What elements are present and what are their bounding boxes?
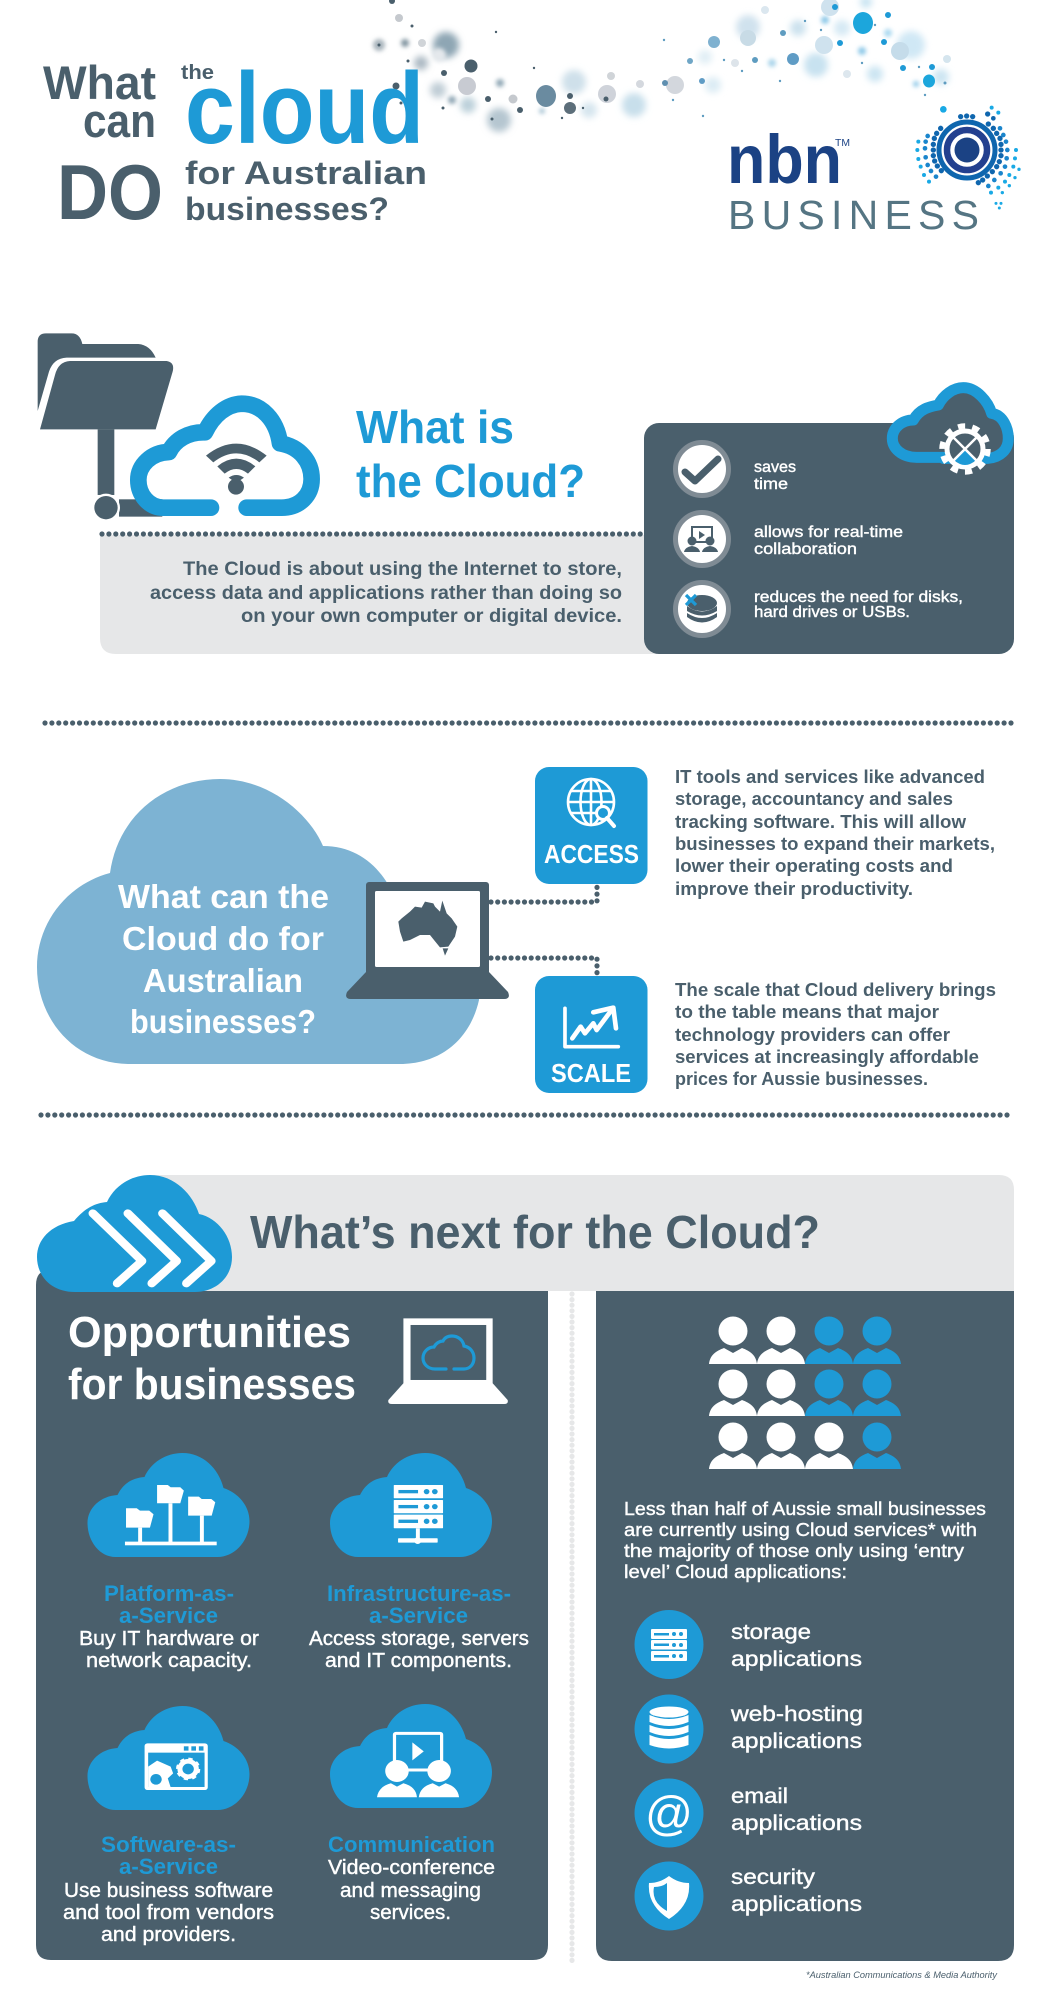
icon: dotted Australia logo [915, 106, 1021, 209]
text: adoption statement [624, 1498, 986, 1582]
icon: laptop with Australia map [346, 882, 509, 999]
text: benefits: allows for real-time [754, 524, 903, 541]
text: adoption statement: Less than half of Aussie small businesses [624, 1498, 986, 1519]
footnote: *Australian Communications & Media Authority [806, 1970, 998, 1981]
icon: cloud with wifi [138, 404, 312, 508]
text: software as a service: and tool from vendors [63, 1902, 274, 1924]
icon: cloud with server [330, 1453, 492, 1557]
text: cloud definition: on your own computer or digital device. [241, 605, 622, 627]
text: scale description [675, 979, 996, 1089]
heading: what is the cloud: What is [356, 401, 514, 453]
nbn business logo: BUSINESS [728, 192, 979, 238]
text: adoption statement: are currently using Cloud services* with [624, 1519, 977, 1540]
text: scale description: technology providers can offer [675, 1024, 950, 1045]
text: software as a service: Software-as- [101, 1832, 236, 1857]
text: benefits: saves [754, 459, 796, 476]
cloud with question: What can the [118, 878, 329, 915]
heading: opportunities: for businesses [68, 1360, 356, 1409]
title: for Australian [185, 155, 427, 191]
icon: cloud with chevrons [37, 1175, 232, 1292]
text: communication [328, 1832, 495, 1924]
text: access description: storage, accountancy and sales [675, 788, 953, 809]
item: security applications: security [731, 1866, 816, 1889]
icon: cloud with gear [892, 388, 1008, 472]
text: platform as a service: network capacity. [86, 1650, 252, 1672]
item: email applications: applications [731, 1812, 862, 1835]
text: benefits: hard drives or USBs. [754, 604, 910, 621]
text: communication: Communication [328, 1832, 495, 1857]
title: businesses? [185, 191, 389, 227]
text: benefits: collaboration [754, 541, 857, 558]
heading: what is the cloud [356, 401, 585, 507]
text: adoption statement: level’ Cloud applications: [624, 1561, 847, 1582]
title [43, 53, 427, 236]
card: platform as a service [79, 1453, 259, 1672]
card: scale: SCALE [551, 1060, 631, 1088]
text: access description [675, 766, 995, 899]
section: what's next [36, 1175, 1014, 1981]
nbn business logo: TM [835, 138, 850, 149]
panel: opportunities [36, 1175, 548, 1960]
icon: globe with magnifier [568, 779, 614, 826]
card: access: ACCESS [544, 841, 639, 869]
item: storage applications [634, 1610, 862, 1679]
text: benefits: reduces the need for disks, [754, 589, 963, 606]
text: infrastructure as a service: and IT components. [325, 1650, 512, 1672]
text: platform as a service: Buy IT hardware or [79, 1628, 259, 1650]
title: can [83, 94, 156, 147]
item: security applications: applications [731, 1893, 862, 1916]
cloud with question: businesses? [130, 1003, 316, 1040]
text: cloud definition: The Cloud is about using the Internet to store, [183, 558, 622, 580]
nbn business logo: nbn [727, 121, 842, 198]
text: scale description: services at increasingly affordable [675, 1046, 979, 1067]
text: infrastructure as a service: Access storage, servers [309, 1628, 529, 1650]
card: communication [328, 1704, 495, 1924]
card: access [535, 767, 648, 884]
title: What [43, 56, 156, 109]
heading: opportunities [68, 1308, 356, 1409]
text: cloud definition [150, 558, 622, 627]
text: access description: IT tools and services like advanced [675, 766, 985, 787]
card: infrastructure as a service [309, 1453, 529, 1672]
panel: cloud adoption [596, 1291, 1014, 1961]
item: email applications: @ [645, 1788, 693, 1841]
cloud with question [37, 779, 479, 1064]
text: cloud definition: access data and applications rather than doing so [150, 582, 622, 604]
text: platform as a service [79, 1581, 259, 1672]
item: storage applications: storage [731, 1621, 811, 1644]
title: the [181, 62, 214, 84]
text: access description: businesses to expand their markets, [675, 833, 995, 854]
decorative particle swarm [373, 0, 951, 132]
text: software as a service: a-Service [119, 1854, 218, 1879]
text: infrastructure as a service [309, 1581, 529, 1672]
text: access description: lower their operating costs and [675, 855, 953, 876]
card: software as a service [63, 1706, 274, 1946]
text: platform as a service: Platform-as- [104, 1581, 234, 1606]
item: web-hosting applications: applications [731, 1730, 862, 1753]
card: scale [535, 976, 648, 1093]
title: cloud [185, 53, 424, 165]
text: benefits: time [754, 476, 788, 493]
icon: folder on network [38, 333, 173, 522]
item: web-hosting applications [634, 1694, 863, 1764]
text: infrastructure as a service: Infrastructure-as- [327, 1581, 511, 1606]
icon: cloud with app window [88, 1706, 250, 1810]
icon: cloud with folders [88, 1453, 250, 1557]
text: benefits [754, 459, 963, 621]
text: infrastructure as a service: a-Service [369, 1603, 468, 1628]
connector: laptop to scale [491, 958, 597, 974]
title: DO [57, 148, 163, 236]
banner [150, 1175, 1014, 1291]
text: scale description: to the table means that major [675, 1001, 939, 1022]
text: software as a service: Use business software [64, 1880, 273, 1902]
icon: cloud with video conference [330, 1704, 492, 1808]
text: software as a service: and providers. [101, 1924, 236, 1946]
icon: laptop with cloud [388, 1318, 508, 1404]
panel: benefits [644, 388, 1014, 654]
text: platform as a service: a-Service [119, 1603, 218, 1628]
heading: opportunities: Opportunities [68, 1308, 351, 1357]
item: web-hosting applications: web-hosting [730, 1703, 863, 1726]
text: access description: improve their productivity. [675, 878, 913, 899]
text: scale description: prices for Aussie businesses. [675, 1068, 928, 1089]
icon: people grid [709, 1316, 901, 1469]
item: storage applications: applications [731, 1648, 862, 1671]
text: communication: Video-conference [328, 1857, 495, 1879]
icon: rising chart [565, 1008, 618, 1047]
text: software as a service [63, 1832, 274, 1946]
heading: what is the cloud: the Cloud? [356, 455, 585, 507]
section: what is the cloud [38, 333, 1014, 654]
item: email applications [634, 1778, 862, 1848]
text: communication: services. [370, 1902, 451, 1924]
panel: definition grey box [100, 535, 660, 654]
item: email applications: email [731, 1785, 788, 1808]
heading: what's next: What’s next for the Cloud? [250, 1206, 820, 1258]
text: adoption statement: the majority of those only using ‘entry [624, 1540, 965, 1561]
item: security applications [634, 1862, 862, 1930]
nbn business logo [727, 106, 1021, 238]
cloud with question: Cloud do for [122, 920, 324, 957]
icon: disks circle [676, 582, 728, 636]
connector: laptop to access [491, 886, 597, 902]
icon: check circle [676, 442, 728, 496]
text: access description: tracking software. This will allow [675, 811, 967, 832]
text: scale description: The scale that Cloud delivery brings [675, 979, 996, 1000]
icon: collaboration circle [676, 512, 728, 566]
text: communication: and messaging [340, 1880, 481, 1902]
section: what can the cloud do [37, 766, 996, 1093]
cloud with question: Australian [143, 962, 303, 999]
